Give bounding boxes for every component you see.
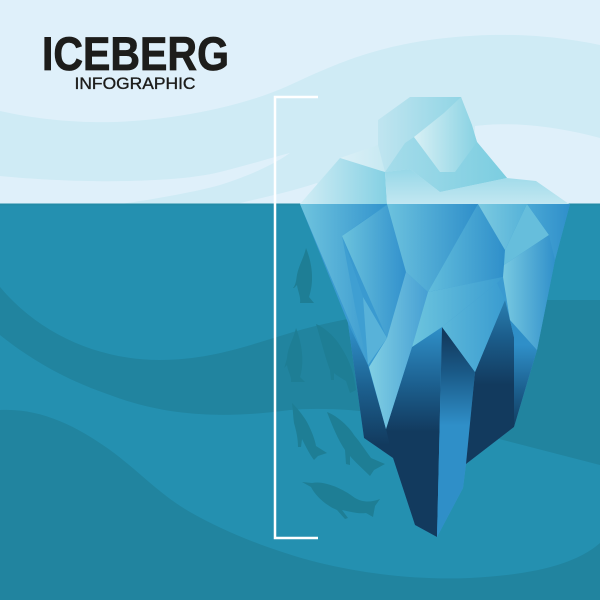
- bracket: [275, 97, 318, 538]
- silhouette base: [300, 204, 570, 537]
- far right outer facet: [527, 204, 570, 260]
- right lower facet: [503, 235, 555, 350]
- lower right center facet: [442, 283, 505, 372]
- penguin 1: [293, 248, 314, 303]
- tapered light facet: [369, 272, 428, 429]
- ocean background: [0, 204, 600, 600]
- penguin 3: [316, 324, 356, 393]
- penguin 6: [302, 482, 380, 519]
- dark central face: [386, 327, 442, 537]
- iceberg below water: [300, 204, 570, 537]
- left inner facet: [342, 205, 406, 338]
- penguin silhouettes: [284, 248, 385, 519]
- iceberg above water: [300, 97, 569, 204]
- right inner facet: [504, 204, 549, 265]
- summit facet: [378, 97, 507, 192]
- sky background: [0, 0, 600, 205]
- far right strip: [510, 320, 537, 427]
- dark right face: [466, 300, 514, 464]
- lower summit facet: [385, 137, 507, 192]
- penguin 2: [284, 328, 305, 382]
- outer left facet: [300, 204, 387, 365]
- left blue sliver: [342, 236, 368, 365]
- far left back facet: [340, 143, 410, 172]
- dark left strip: [348, 323, 400, 458]
- lower center facet: [412, 277, 503, 347]
- left lower facet: [363, 297, 387, 365]
- right middle facet: [428, 204, 505, 292]
- penguin 5: [327, 412, 385, 476]
- upper right facet: [478, 204, 527, 250]
- inner summit facet: [414, 97, 477, 172]
- center facet: [387, 204, 478, 292]
- central blue strip: [437, 327, 475, 537]
- penguin 4: [292, 403, 327, 460]
- right shoulder facet: [385, 169, 569, 204]
- left shoulder facet: [300, 158, 387, 204]
- title: INFOGRAPHIC: [74, 75, 196, 93]
- title: ICEBERG: [42, 27, 229, 80]
